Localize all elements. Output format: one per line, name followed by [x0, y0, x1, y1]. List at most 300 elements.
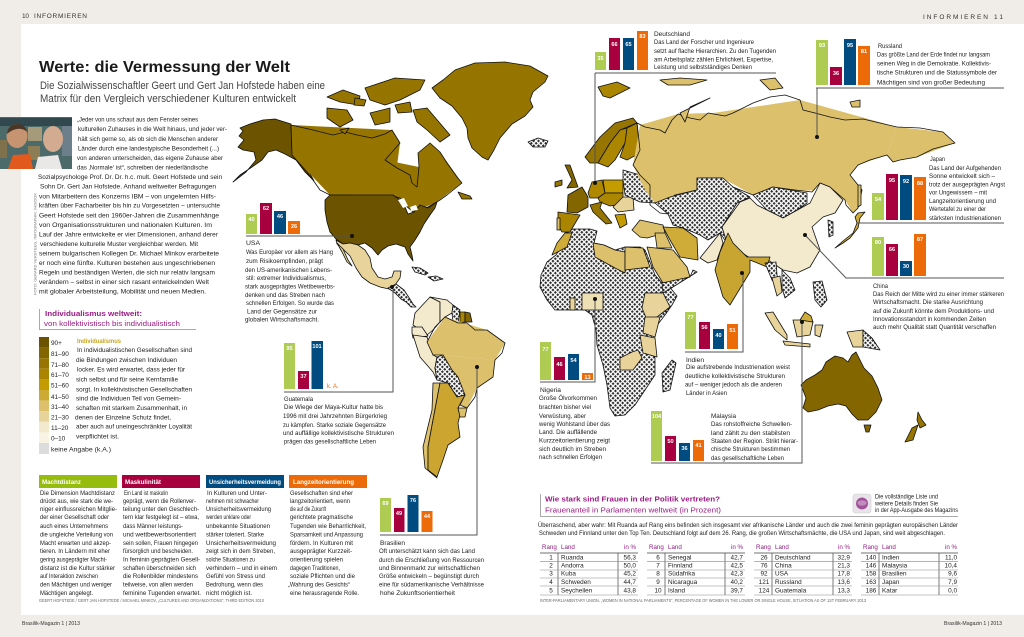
text: Nigeria [538, 387, 610, 461]
intro text block: Geert Hofstede seit den 1960er-Jahren die Zusammenhänge [39, 212, 219, 219]
panel: Unsicherheitsvermeidung: Unsicherheitsvermeidung [209, 479, 281, 486]
intro text block: Regeln und beständigen Werten, die sich nur relativ langsam [39, 270, 215, 277]
table 1: 43,8 [624, 587, 636, 594]
text: Malaysia: das gesellschaftliche Leben [711, 455, 784, 462]
text: Russland: seinen Weg in die Demokratie. Kollektivis- [877, 60, 991, 68]
app note: Die vollständige Liste und [875, 494, 938, 500]
text: Brasilien: Größe entwickeln – begünstigt durch [379, 573, 479, 580]
panel: Langzeitorientierung: dagegen Traditionen, [290, 565, 340, 572]
table 3: USA [775, 570, 789, 578]
text: Nigeria: sich deutlich im Streben [539, 446, 606, 453]
text: USA: zum Risikoempfinden, prägt [246, 258, 323, 265]
panel: Maskulinität: Ein Land ist maskulin [124, 490, 168, 497]
panel: Maskulinität: teilung unter den Geschlech- [123, 506, 199, 513]
table 2: Nicaragua [668, 579, 698, 586]
text: Nigeria: Verwüstung, aber [539, 413, 587, 420]
legend: colour scale: 81–90 [51, 351, 69, 358]
intro text block: verschiedene kulturelle Muster vergleichbar werden. Mit [40, 241, 198, 248]
table 2: Finnland [668, 562, 693, 570]
panel: Langzeitorientierung: Sparsamkeit und Anpassung [290, 532, 363, 538]
panel: Unsicherheitsvermeidung: In Kulturen und Unter- [207, 490, 267, 497]
table 3: 21,3 [838, 562, 850, 570]
chart: Indien: 51 [729, 328, 736, 334]
panel: Unsicherheitsvermeidung: solche Situationen zu [206, 556, 255, 564]
page header right: 11 [994, 14, 1003, 21]
chart: Indien [685, 312, 738, 349]
text: Deutschland: Deutschland [654, 31, 690, 38]
text: Deutschland: setzt auf flache Hierarchien. Zu den Tugenden [654, 48, 776, 55]
legend: colour scale [39, 337, 111, 454]
panel: Maskulinität: und wettbewerbsorientiert [123, 532, 196, 538]
table 2: Südafrika [668, 570, 695, 578]
text: USA: stil: extremer Individualismus, [246, 275, 326, 282]
text: China: auf die Zukunft könnte dem Produktions- und [873, 308, 994, 315]
table 2: Land [668, 544, 682, 551]
chart: Deutschland: 65 [625, 42, 632, 48]
legend: colour scale: 61–70 [51, 372, 69, 379]
panel: Maskulinität: dass Männer leistungs- [123, 523, 183, 530]
text: Russland: tische Strukturen und die Statussymbole der [877, 70, 998, 76]
panel: Unsicherheitsvermeidung: zeigt sich in dem Streben, [206, 548, 275, 555]
map: Africa [540, 229, 677, 416]
table 1: Land [561, 544, 575, 551]
chart: Guatemala: 37 [300, 374, 307, 380]
chart: Nigeria: 13 [584, 375, 591, 381]
table 1: 4 [549, 579, 553, 586]
table 1: 50,0 [624, 562, 636, 570]
table 4: Katar [882, 587, 898, 594]
chart: Japan: 92 [903, 179, 909, 185]
text: Brasilien [379, 540, 484, 597]
intro text block [38, 116, 227, 296]
panel: Maskulinität: schaften überschneiden sich [123, 565, 196, 572]
text: Nigeria: Kurzzeitorientierung zeigt [539, 438, 610, 444]
chart: Nigeria [540, 342, 593, 381]
text: Individualismus explanation: sorgt. In kollektivistischen Gesellschaften [76, 386, 192, 393]
map: Europe [528, 82, 665, 238]
table 4: in % [945, 544, 958, 551]
text: Japan: Wertetafel zu einer der [929, 206, 987, 213]
panel: Langzeitorientierung [288, 475, 367, 597]
panel: Machtdistanz: den Mächtigen und weniger [40, 582, 113, 588]
table 2: 42,5 [731, 562, 743, 570]
chart: Japan: 95 [889, 178, 895, 184]
text: Russland [877, 43, 998, 86]
intro text block: Länder durch eine landestypische Besonderheit (...) [78, 145, 219, 152]
women in politics heading: Wie stark sind Frauen in der Politik vertreten? [545, 494, 720, 504]
chart: USA: 46 [277, 214, 283, 220]
text: Deutschland: am Arbeitsplatz zählen Ehrlichkeit, Expertise, [654, 56, 773, 64]
table 4: Indien [882, 554, 900, 562]
subtitle [40, 80, 325, 105]
table 3: China [775, 562, 792, 570]
text: Russland: Russland [878, 43, 902, 50]
intro text block: von Mitarbeitern des Konzerns IBM – von ungelernten Hilfs- [39, 193, 216, 200]
table 2: 39,7 [731, 587, 743, 594]
chart: Malaysia: 104 [652, 414, 662, 420]
panel: Maskulinität: Maskulinität [125, 479, 162, 486]
text: Individualismus explanation: schaften mit starkem Zusammenhalt, in [76, 405, 187, 412]
text: Guatemala: zu kämpfen. Starke soziale Gegensätze [283, 422, 386, 429]
chart: Russland [816, 39, 870, 85]
legend: colour scale: 71–80 [51, 362, 69, 369]
chart: China: 80 [875, 240, 881, 246]
chart: Nigeria: 54 [570, 358, 577, 364]
chart: Russland: 36 [833, 71, 839, 77]
panel: Machtdistanz: der einer Gesellschaft oder [40, 514, 110, 521]
chart: Guatemala: k. A. [327, 384, 339, 390]
women in politics heading [540, 494, 958, 516]
text: Individualismus explanation: sich selbst und für seine Kernfamilie [76, 376, 178, 383]
text: Deutschland: Das Land der Forscher und Ingenieure [654, 39, 754, 46]
panel: Machtdistanz: drückt aus, wie stark die we- [40, 498, 113, 505]
panel: Unsicherheitsvermeidung: Gefühl von Stress und [206, 573, 265, 580]
table 1: Rang [542, 544, 557, 551]
panel: Unsicherheitsvermeidung: Unsicherheitsvermeidung [206, 540, 276, 547]
intro text block: das ‚Normale‘ ist“, schreiben der niederländische [77, 164, 208, 171]
chart: USA: 40 [248, 217, 255, 223]
chart: Guatemala: 101 [312, 344, 322, 350]
chart: Brasilien: 49 [396, 511, 402, 517]
table 4: 163 [866, 579, 877, 586]
legend: colour scale: keine Angabe (k.A.) [51, 446, 111, 454]
text: Nigeria: brachten bisher viel [539, 404, 591, 411]
panel: Langzeitorientierung: Gesellschaften sind eher [290, 490, 354, 497]
subtitle: Matrix für den Vergleich verschiedener Kulturen entwickelt [40, 93, 296, 105]
text: Japan [929, 156, 1005, 222]
table 2: Rang [649, 544, 664, 551]
panel: Unsicherheitsvermeidung: nehmen mit schwacher [206, 498, 260, 505]
intro text block: Sozialpsychologe Prof. Dr. Dr. h.c. mult. Geert Hofstede und sein [38, 174, 222, 181]
intro text block: Sohn Dr. Gert Jan Hofstede. Anhand weltweiter Befragungen [40, 183, 216, 190]
text: USA: USA [246, 240, 261, 247]
chart: Nigeria: 77 [542, 347, 549, 353]
text: Nigeria: nach schnellen Erfolgen [539, 454, 602, 461]
text: Indien: auf – weniger jedoch als die anderen [685, 382, 782, 388]
chart: Malaysia: 41 [695, 443, 702, 449]
chart: Japan [872, 174, 926, 220]
table 2: Island [668, 587, 685, 594]
intro text block: verändern – selbst in einer sich rasant entwickelnden Welt [39, 279, 209, 286]
table 3: Russland [775, 579, 802, 586]
panel: Maskulinität: fürsorglich und bescheiden. [123, 548, 193, 555]
text: Brasilien: eine für südamerikanische Verhältnisse [379, 582, 484, 588]
table 4: 0,0 [948, 587, 957, 594]
chart: Brasilien: 44 [424, 514, 431, 520]
table 1: Seychellen [561, 587, 593, 594]
intro text block: kräften über Facharbeiter bis hin zu Vorgesetzten – untersuchte [39, 203, 220, 210]
text: Guatemala [283, 396, 394, 446]
table 1: 44,7 [624, 579, 636, 586]
table 3: Guatemala [775, 587, 807, 594]
footer left: Brasilik-Magazin 1 | 2013 [22, 621, 80, 627]
table 4: 11,0 [945, 554, 957, 562]
women in politics intro: Schweden und Finnland unter den Top Ten. Deutschland folgt auf dem 26. Rang, die großen Wirtschaftsmächte, die USA und Japan, sind weit abgeschlagen. [539, 530, 945, 537]
table 4 [861, 544, 958, 595]
table 3: 121 [759, 579, 770, 586]
panel: Unsicherheitsvermeidung: werden unklare oder [205, 514, 252, 521]
text: USA: globalen Wirtschaftsmacht. [245, 316, 319, 324]
panel: Unsicherheitsvermeidung: stärker toleriert. Starke [206, 532, 264, 538]
table 2: 40,2 [731, 579, 743, 586]
table 2: in % [731, 544, 744, 551]
table 3: Deutschland [775, 554, 811, 562]
intro text block: „Jeder von uns schaut aus dem Fenster seines [77, 116, 198, 124]
map: Australia and New Zealand [801, 352, 926, 442]
intro text block: hält sich gerne so, als ob sich die Menschen anderer [78, 136, 219, 143]
photo credit: FOTO: GERARD VERSTEEG, INFOGRAPHIK: IHD/DOK [32, 193, 38, 295]
chart: Japan: 88 [917, 181, 923, 187]
chart: Japan: 54 [875, 197, 882, 203]
table 4: 140 [866, 554, 877, 562]
text: Brasilien: hohe Zukunftsorientierheit [380, 590, 455, 597]
source note: parliaments: INTER-PARLIAMENTARY UNION, „WOMEN IN NATIONAL PARLIAMENTS“, PERCENTAGE OF WOMEN IN THE LOWER OR SINGLE HOUSE, SITUATION AS OF 1ST FEBRUARY 2013 [540, 598, 867, 603]
table 3: 76 [760, 562, 768, 570]
panel: Unsicherheitsvermeidung [205, 475, 284, 597]
table 1: 5 [549, 587, 553, 594]
table 4: 7,9 [948, 579, 957, 586]
chart: Malaysia: 36 [681, 446, 688, 452]
panel: Machtdistanz: Macht erwarten und akzep- [40, 540, 111, 547]
intro text block: kulturellen Zuhauses in die Welt hinaus, und jeder ver- [78, 126, 227, 133]
women in politics intro: Überraschend, aber wahr: Mit Ruanda auf Rang eins befinden sich insgesamt vier afrikanische Länder und auch die zwei feminin geprägten europäischen Länder [538, 521, 959, 529]
text: Malaysia [711, 413, 798, 462]
text: Brasilien: Oft unterschätzt kann sich das Land [379, 548, 475, 555]
table 4: Land [882, 544, 896, 551]
panel: Langzeitorientierung: orientierung spielen [290, 556, 343, 564]
chart: Deutschland: 66 [611, 42, 618, 48]
table 1: 45,2 [624, 570, 636, 578]
chart: Brasilien: 69 [382, 501, 389, 507]
table 3 [754, 544, 852, 595]
text: China: Das Reich der Mitte wird zu einer immer stärkeren [873, 291, 1004, 298]
table 3: 13,3 [838, 587, 850, 594]
text: China: Wirtschaftsmacht. Die starke Ausrichtung [873, 299, 983, 306]
table 4: 146 [866, 562, 877, 570]
table 1: Ruanda [561, 554, 584, 562]
chart: USA: 62 [263, 206, 269, 212]
panel: Maskulinität: tern klar festgelegt ist – etwa, [123, 514, 199, 521]
chart: China [872, 234, 926, 276]
text: USA: denken und das Streben nach [245, 292, 325, 299]
panel: Machtdistanz: tieren. In Ländern mit eher [40, 548, 111, 555]
panel: Machtdistanz: die ungleiche Verteilung von [40, 532, 113, 538]
panel: Machtdistanz: niger einflussreichen Mitglie- [40, 506, 117, 513]
text: USA [245, 240, 335, 324]
text: Malaysia: land zählt zu den stabilsten [711, 430, 790, 437]
text: Individualismus explanation: verpflichtet ist. [76, 434, 119, 441]
chart: Malaysia: 50 [667, 439, 674, 445]
panel: Machtdistanz: Die Dimension Machtdistanz [40, 490, 115, 497]
legend: colour scale: 51–60 [51, 382, 69, 390]
text: USA: Land der Gegensätze zur [247, 308, 318, 316]
map: Asia [633, 78, 955, 350]
chart: Guatemala: 95 [286, 346, 293, 352]
table 1: Kuba [561, 570, 576, 578]
table 4: 9,6 [948, 570, 957, 578]
table 1: Andorra [561, 562, 584, 570]
legend: colour scale: 21–30 [51, 414, 69, 422]
panel: Maskulinität: die Rollenbilder mindestens [123, 573, 198, 580]
table 4: 158 [866, 570, 877, 578]
intro text block: von Organisationsstrukturen und nationalen Kulturen. Im [39, 222, 212, 229]
text: Nigeria: wenig Wohlstand über das [538, 421, 610, 428]
world map [233, 62, 955, 478]
text: Guatemala: Guatemala [284, 396, 313, 403]
panel: Machtdistanz: auch eines Unternehmens [40, 523, 108, 530]
table 3: in % [838, 544, 851, 551]
intro text block: von anderen unterscheiden, das eigene Zuhause aber [77, 155, 224, 162]
table 3: 13,6 [838, 579, 850, 586]
chart: China: 87 [917, 237, 923, 243]
text: Guatemala: prägen das gesellschaftliche Leben [284, 438, 376, 446]
table 4: Brasilien [882, 570, 907, 578]
chart: USA: 26 [291, 224, 297, 230]
page header left: 10 [22, 13, 29, 20]
page header right: INFORMIEREN [923, 14, 988, 21]
legend heading: von kollektivistisch bis individualistisch [44, 321, 180, 328]
table 2: 10 [654, 587, 662, 594]
text: Japan: vor Ungewissem – mit [929, 190, 987, 196]
app note: weitere Details finden Sie [874, 500, 938, 508]
text: Malaysia: chische Strukturen bestimmen [711, 446, 790, 453]
text: Japan: trotz der ausgeprägten Angst [929, 182, 1005, 188]
table 4: 10,4 [945, 562, 957, 570]
map: South America [412, 297, 505, 478]
table 4: Japan [882, 579, 900, 586]
table 3: 17,8 [838, 570, 850, 578]
text: China [873, 283, 1004, 331]
panel: Unsicherheitsvermeidung: nicht möglich ist. [206, 590, 252, 597]
panel: Machtdistanz: Machtdistanz [42, 479, 82, 486]
text: Deutschland [654, 31, 776, 71]
text: Individualismus explanation: aber auch auf uneingeschränkter Loyalität [76, 424, 192, 431]
table 3: Land [775, 544, 789, 551]
table 3: 32,9 [838, 554, 850, 562]
chart: Indien: 40 [715, 333, 722, 339]
panel: Unsicherheitsvermeidung: Bedrohung, wenn dies [206, 582, 263, 588]
panel: Machtdistanz [39, 475, 117, 597]
chart: Russland: 81 [861, 49, 867, 55]
panel: Maskulinität: feminine Tugenden erwartet. [123, 590, 201, 597]
table 3: 26 [760, 554, 768, 562]
chart: Malaysia [651, 411, 704, 461]
text: China: auch mehr Qualität statt Quantität verschaffen [873, 324, 996, 331]
intro text block: er noch eine fünfte. Kulturen bestehen aus ungeschriebenen [39, 260, 215, 267]
table 1: 1 [549, 554, 553, 562]
chart: Deutschland: 83 [639, 34, 646, 40]
table 4: 186 [866, 587, 877, 594]
table 4: Rang [863, 544, 878, 551]
table 1 [540, 544, 638, 595]
panel: Langzeitorientierung: Langzeitorientierung [293, 479, 354, 486]
subtitle: Die Sozialwissenschaftler Geert und Gert Jan Hofstede haben eine [40, 80, 325, 92]
text: Individualismus explanation [75, 338, 192, 441]
panel: Machtdistanz: gering ausgeprägter Macht- [40, 556, 107, 564]
table 2: 9 [656, 579, 660, 586]
text: Individualismus explanation: locker. Es wird erwartet, dass jeder für [77, 366, 186, 373]
panel: Unsicherheitsvermeidung: unbekannte Situationen [206, 523, 270, 530]
app note [874, 494, 958, 514]
intro text block: mit globaler Arbeitsteilung, Mobilität und neuen Medien. [39, 289, 206, 296]
intro text block: Lauf der Jahre entwickelte er vier Dimensionen, anhand derer [39, 231, 219, 238]
icon: app [853, 494, 871, 513]
text: Japan: stärksten Industrienationen [929, 215, 1001, 222]
app note: in der App-Ausgabe des Magazins [875, 507, 958, 514]
chart: Nigeria: 46 [556, 362, 563, 368]
page header left: INFORMIEREN [34, 13, 87, 20]
chart: Indien: 77 [687, 315, 694, 321]
text: Individualismus explanation: die Bindungen zwischen Individuen [76, 357, 177, 364]
women in politics heading: Frauenanteil in Parlamenten weltweit (in Prozent) [545, 506, 721, 514]
panel: Langzeitorientierung: Tugenden wie Beharrlichkeit, [290, 523, 366, 530]
text: Indien: Länder in Asien [686, 390, 727, 397]
table 2: 42,3 [731, 570, 743, 578]
table 3: Rang [756, 544, 771, 551]
text: Malaysia: Das rohstoffreiche Schwellen- [711, 421, 792, 428]
table 1: Schweden [561, 579, 591, 586]
footer right: Brasilik-Magazin 1 | 2013 [944, 621, 1002, 627]
panel: Maskulinität: In feminin geprägten Gesell- [123, 556, 200, 564]
table 2: 7 [656, 562, 660, 570]
title: Werte: die Vermessung der Welt [39, 59, 291, 76]
panel: Maskulinität: sein sollen, Frauen hingegen [123, 540, 198, 547]
table 3: 92 [760, 570, 768, 578]
panel: Langzeitorientierung: eine herausragende Rolle. [290, 590, 359, 597]
table 1: 56,3 [624, 554, 636, 562]
table 1: in % [624, 544, 637, 551]
panel: Maskulinität: geprägt, wenn die Rollenver- [123, 498, 196, 505]
chart: Brasilien [380, 495, 432, 532]
chart: Russland: 93 [819, 43, 825, 49]
text: Individualismus explanation: sind die Individuen Teil von Gemein- [76, 395, 181, 402]
text: Brasilien: durch die Erschließung von Ressourcen [379, 557, 484, 564]
table 1: 2 [549, 562, 553, 570]
chart: China: 30 [903, 264, 909, 270]
text: Guatemala: und auffällige kollektivistische Strukturen [283, 430, 394, 437]
chart: Guatemala [284, 341, 339, 390]
panel: Langzeitorientierung: langzeitorientiert, wenn [290, 498, 350, 505]
women in politics intro [538, 521, 959, 537]
text: Brasilien: Brasilien [380, 540, 405, 547]
legend: colour scale: 90+ [51, 340, 62, 347]
chart: USA [246, 203, 300, 234]
panel: Machtdistanz: auf Interaktion zwischen [40, 573, 98, 580]
text: China: China [873, 283, 888, 290]
text: USA: stark ausgeprägtes Wettbewerbs- [245, 284, 335, 290]
legend: colour scale: 41–50 [51, 394, 69, 401]
text: Japan: Sonne entwickelt sich – [929, 173, 995, 180]
text: Nigeria: Nigeria [540, 387, 561, 394]
map: North America [233, 62, 548, 307]
table 2: 6 [656, 554, 660, 562]
callout dots [350, 135, 819, 369]
table 1: 3 [549, 570, 553, 578]
text: USA: Was Europäer vor allem als Hang [246, 249, 333, 256]
panel: Langzeitorientierung: gerichtete pragmatische [290, 514, 353, 521]
text: Deutschland: Leistung und selbstständiges Denken [654, 64, 752, 71]
panel: Langzeitorientierung: die auf die Zukunft [290, 506, 326, 513]
text: Guatemala: 1996 mit drei Jahrzehnten Bürgerkrieg [283, 413, 387, 420]
chart: Indien: 56 [701, 325, 708, 331]
table 2 [647, 544, 745, 595]
panel: Maskulinität: teilweise, von allen werden [123, 582, 193, 588]
legend heading [40, 309, 196, 330]
table 3: 124 [759, 587, 770, 594]
text: China: Innovationsstandort in kommenden Zeiten [873, 316, 986, 323]
text: USA: schnellen Erfolgen. So wurde das [246, 300, 334, 307]
text: Individualismus explanation: Individualismus [77, 338, 121, 345]
